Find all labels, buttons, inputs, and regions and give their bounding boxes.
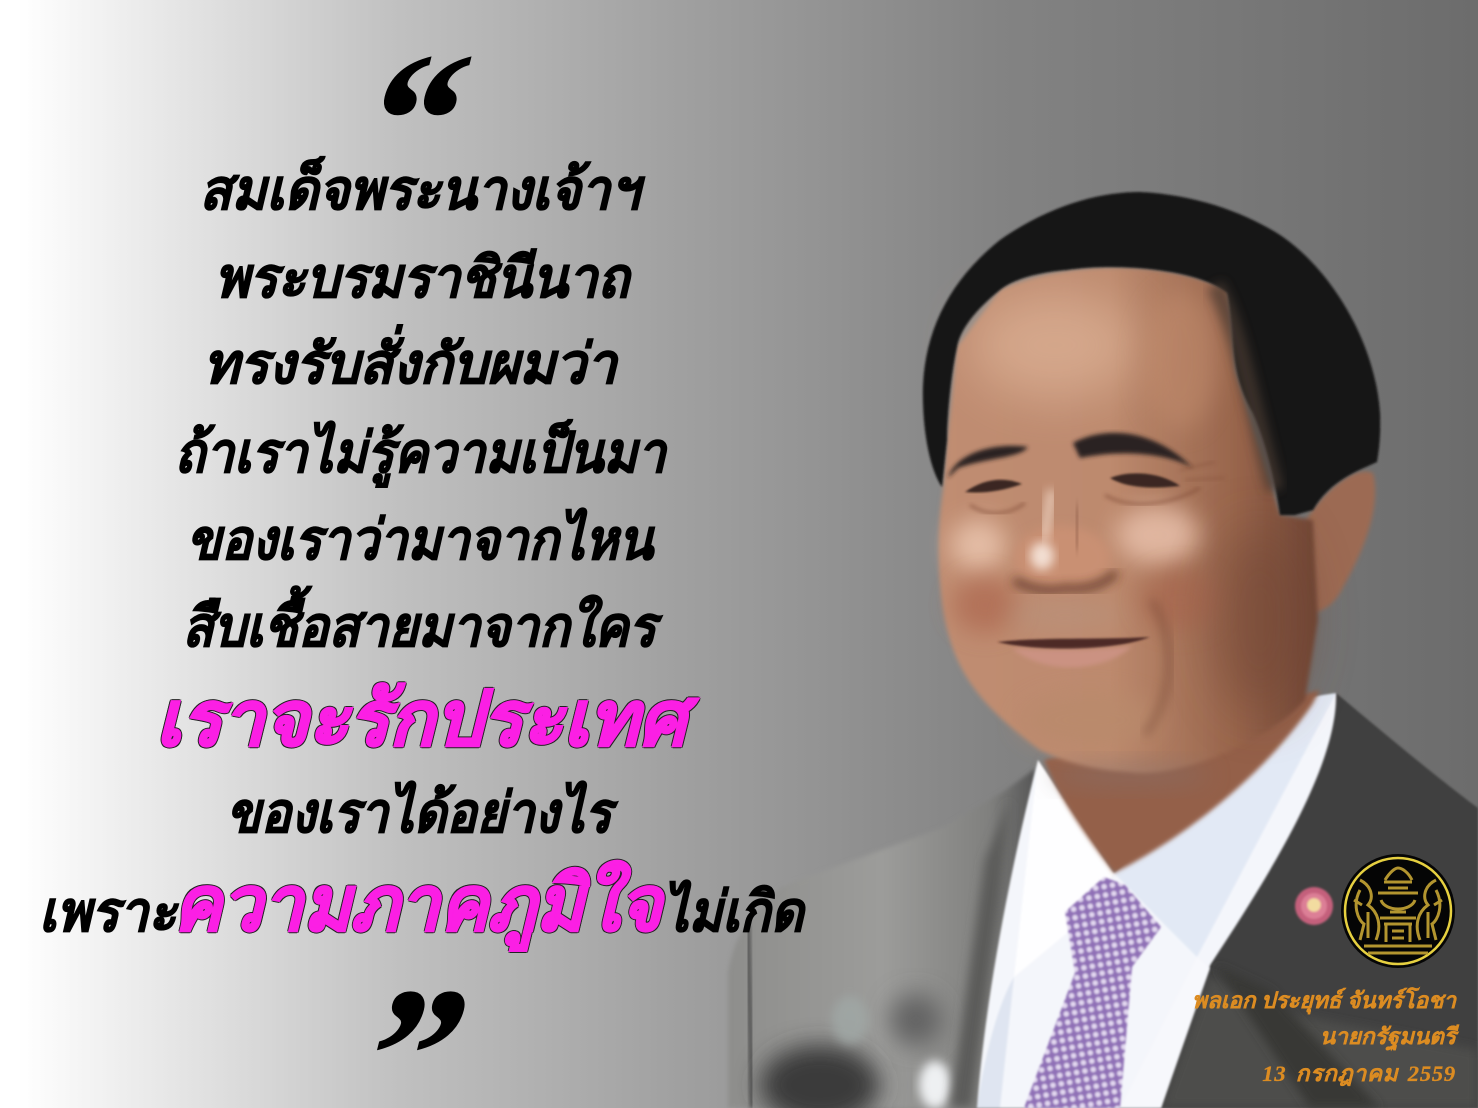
quote line 6: สืบเชื้อสายมาจากใคร: [182, 597, 656, 659]
quote line 4: ถ้าเราไม่รู้ความเป็นมา: [174, 423, 666, 485]
neck: [1044, 690, 1320, 873]
opening quotation mark: “: [333, 13, 485, 229]
quote line 3: ทรงรับสั่งกับผมว่า: [203, 334, 617, 396]
attribution: [1192, 986, 1460, 1086]
word before highlight: เพราะ: [39, 882, 176, 944]
word after highlight: ไม่เกิด: [663, 882, 804, 944]
attribution title: นายกรัฐมนตรี: [1320, 1024, 1456, 1049]
quote text block: [39, 13, 806, 1108]
lapel pin: [1295, 887, 1333, 925]
tie: [1024, 877, 1161, 1108]
face: [939, 267, 1318, 773]
quote line 8: ของเราได้อย่างไร: [226, 783, 612, 845]
facial shading: [950, 290, 1305, 787]
hair: [923, 192, 1380, 515]
highlighted line: love the country: เราจะรักประเทศ: [156, 678, 686, 762]
shirt: [977, 693, 1336, 1108]
highlighted pride phrase: ความภาคภูมิใจ: [173, 863, 662, 947]
eyebrows and eyes: [948, 433, 1225, 513]
quote line 5: ของเราว่ามาจากไหน: [186, 510, 653, 572]
suit: [728, 693, 1478, 1108]
quote line 9 with highlighted pride phrase: [39, 858, 806, 953]
mouth: [997, 637, 1150, 667]
attribution name: พลเอก ประยุทธ์ จันทร์โอชา: [1192, 988, 1456, 1013]
attribution date: 13 กรกฎาคม 2559: [1262, 1061, 1456, 1086]
quote line 2: พระบรมราชินีนาถ: [215, 248, 629, 310]
emblem: government seal: [1341, 854, 1455, 968]
quote line 1: สมเด็จพระนางเจ้าฯ: [200, 160, 640, 222]
ear: [1305, 471, 1375, 613]
nose: [1014, 490, 1116, 590]
